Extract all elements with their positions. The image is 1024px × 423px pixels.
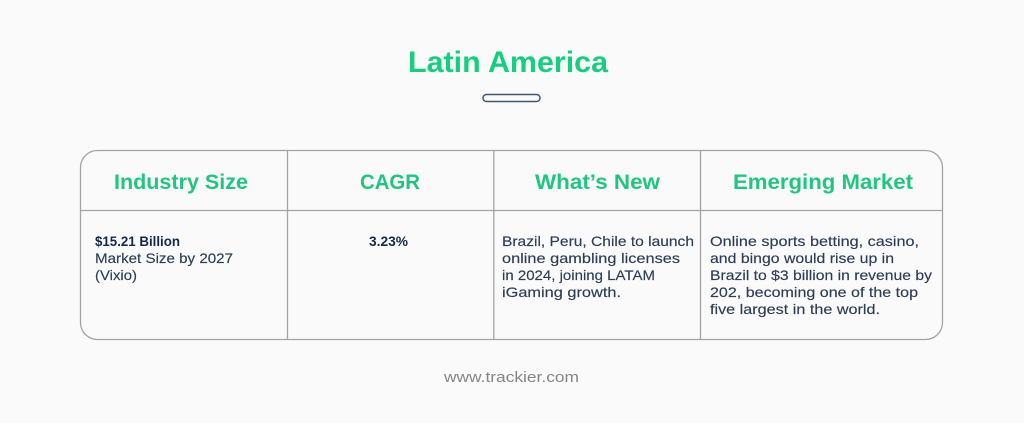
column: what's new: What’s New xyxy=(535,171,661,194)
column: emerging market: and bingo would rise up in xyxy=(710,250,894,266)
panel: market table xyxy=(80,150,942,340)
column: emerging market xyxy=(710,171,932,317)
column: CAGR xyxy=(360,171,420,249)
column: what's new: in 2024, joining LATAM xyxy=(502,267,655,283)
column: industry size: $15.21 Billion xyxy=(95,233,180,249)
column: what's new: Brazil, Peru, Chile to launch xyxy=(502,233,694,249)
table frame xyxy=(80,150,942,340)
column: what's new: iGaming growth. xyxy=(502,284,621,300)
column: industry size: (Vixio) xyxy=(95,267,137,283)
column: emerging market: Online sports betting, casino, xyxy=(710,233,919,249)
column: industry size: Market Size by 2027 xyxy=(95,250,233,266)
column: emerging market: Brazil to $3 billion in revenue by xyxy=(710,267,932,283)
column: CAGR: CAGR xyxy=(360,171,420,194)
column: emerging market: 202, becoming one of the top xyxy=(710,284,918,300)
column: emerging market: Emerging Market xyxy=(733,171,913,194)
footer url: www.trackier.com xyxy=(443,369,579,386)
title: Latin America xyxy=(408,46,608,79)
column: what's new xyxy=(502,171,694,300)
column: industry size: Industry Size xyxy=(114,171,248,194)
column: what's new: online gambling licenses xyxy=(502,250,680,266)
column: CAGR: 3.23% xyxy=(369,233,409,249)
title underline pill xyxy=(483,94,540,102)
column: emerging market: five largest in the world. xyxy=(710,301,880,317)
column: industry size xyxy=(95,171,248,283)
